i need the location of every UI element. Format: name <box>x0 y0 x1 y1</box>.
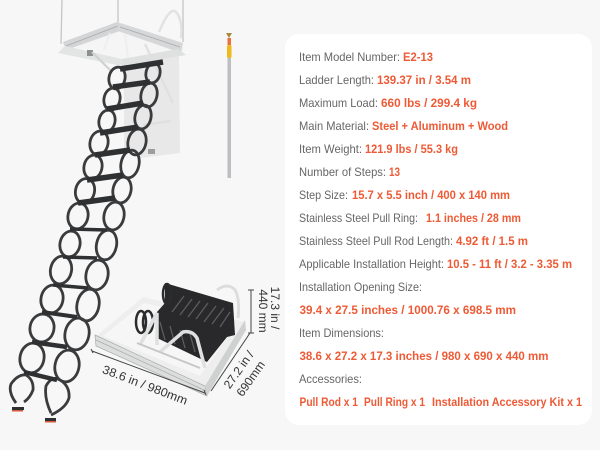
ladder ceiling frame with backing board <box>58 0 186 158</box>
spec: item model number: E2-13 <box>403 50 433 64</box>
spec: installation height: 10.5 - 11 ft / 3.2 - 3.35 m <box>447 257 572 271</box>
spec: pull rod length: Stainless Steel Pull Rod Length: <box>299 234 453 248</box>
pull rod <box>226 33 232 178</box>
spec: step size: Step Size: <box>299 188 348 202</box>
spec: ladder length: Ladder Length: <box>299 73 374 87</box>
spec: installation opening size: 39.4 x 27.5 inches / 1000.76 x 698.5 mm <box>300 303 516 317</box>
spec: ladder length <box>299 73 471 87</box>
spec: number of steps: Number of Steps: <box>299 165 386 179</box>
spec: accessories: Pull Rod x 1 <box>300 395 358 409</box>
dimension: height: 17.3 in / <box>268 287 282 330</box>
spec: pull ring: Stainless Steel Pull Ring: <box>299 211 418 225</box>
spec: installation height: Applicable Installation Height: <box>299 257 444 271</box>
dimension: length <box>91 349 206 408</box>
dimension: width: 27.2 in / <box>221 348 257 391</box>
spec: item dimensions: 38.6 x 27.2 x 17.3 inches / 980 x 690 x 440 mm <box>300 349 548 363</box>
spec: installation height <box>299 257 572 271</box>
dimension: length: 38.6 in / 980mm <box>100 362 190 408</box>
spec: pull ring <box>299 211 521 225</box>
spec: item weight: Item Weight: <box>299 142 362 156</box>
spec: installation opening size: Installation Opening Size: <box>299 280 422 294</box>
spec: item model number: Item Model Number: <box>299 50 400 64</box>
spec: accessories <box>299 372 582 409</box>
dimension: height: 440 mm <box>256 289 270 333</box>
spec: maximum load: 660 lbs / 299.4 kg <box>381 96 477 110</box>
spec: maximum load: Maximum Load: <box>299 96 378 110</box>
dimension: height <box>248 287 282 333</box>
spec: pull ring: 1.1 inches / 28 mm <box>426 211 521 225</box>
spec: main material: Steel + Aluminum + Wood <box>372 119 508 133</box>
spec: number of steps: 13 <box>389 165 400 179</box>
spec: step size: 15.7 x 5.5 inch / 400 x 140 mm <box>352 188 510 202</box>
spec: main material <box>299 119 508 133</box>
spec: main material: Main Material: <box>299 119 369 133</box>
spec: accessories: Installation Accessory Kit x 1 <box>432 395 582 409</box>
spec: accessories: Accessories: <box>299 372 362 386</box>
spec: ladder length: 139.37 in / 3.54 m <box>377 73 471 87</box>
spec: item dimensions: Item Dimensions: <box>299 326 384 340</box>
spec: item weight <box>299 142 458 156</box>
panel: specifications <box>285 34 592 425</box>
spec: pull rod length: 4.92 ft / 1.5 m <box>456 234 528 248</box>
spec: item weight: 121.9 lbs / 55.3 kg <box>365 142 458 156</box>
spec: item dimensions <box>299 326 548 363</box>
dimension: width: 690mm <box>234 358 268 399</box>
folded ladder package <box>95 283 246 396</box>
spec: maximum load <box>299 96 477 110</box>
scissor ladder <box>10 62 163 422</box>
spec: installation opening size <box>299 280 516 317</box>
dimension: width <box>211 333 268 399</box>
spec: accessories: Pull Ring x 1 <box>364 395 425 409</box>
